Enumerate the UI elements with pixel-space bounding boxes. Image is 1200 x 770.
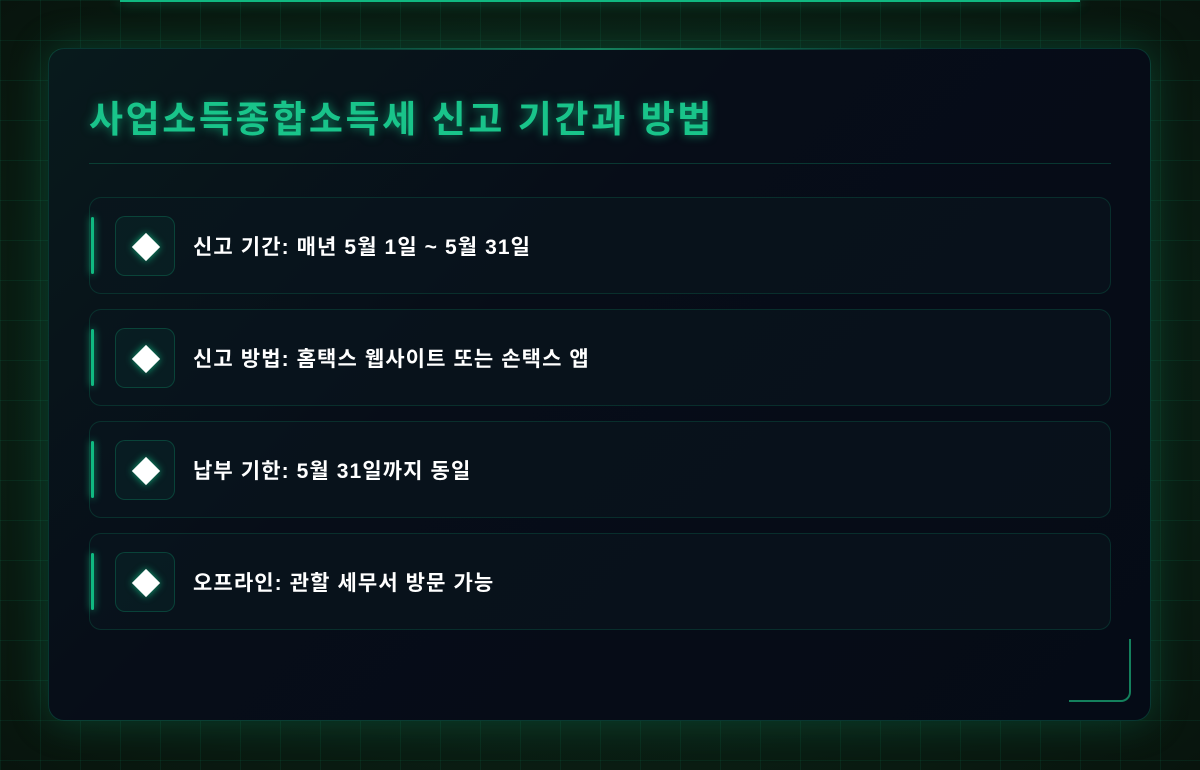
icon: diamond <box>115 328 175 388</box>
text: offline: 오프라인: 관할 세무서 방문 가능 <box>193 572 494 595</box>
item: payment deadline <box>89 421 1111 518</box>
icon: diamond <box>115 552 175 612</box>
icon: diamond <box>115 440 175 500</box>
icon: diamond <box>115 216 175 276</box>
item: filing method <box>89 309 1111 406</box>
text: payment deadline: 납부 기한: 5월 31일까지 동일 <box>193 460 471 483</box>
text: filing period: 신고 기간: 매년 5월 1일 ~ 5월 31일 <box>193 236 531 259</box>
corner bracket decoration <box>1069 639 1131 702</box>
text: filing method: 신고 방법: 홈택스 웹사이트 또는 손택스 앱 <box>193 348 590 371</box>
item: offline <box>89 533 1111 630</box>
title: 사업소득종합소득세 신고 기간과 방법 <box>89 99 714 140</box>
item: filing period <box>89 197 1111 294</box>
